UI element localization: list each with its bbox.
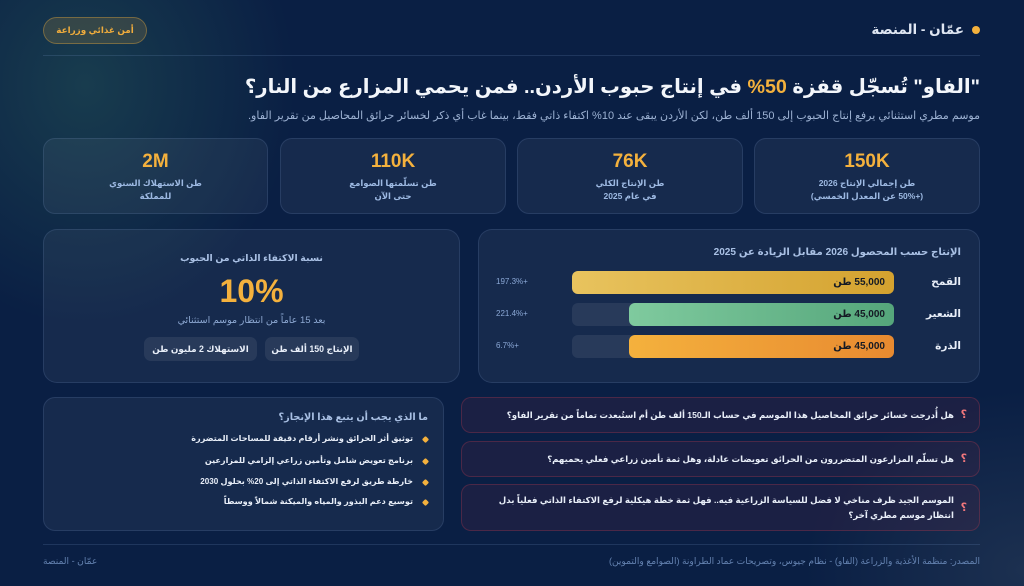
list item 1 (422, 436, 429, 443)
bar row: corn (496, 335, 961, 358)
bar row: wheat: القمح (931, 276, 961, 288)
question 2 (461, 441, 980, 477)
bar row: wheat: +197.3% (496, 277, 528, 286)
question 1: ؟ (961, 409, 967, 421)
chip: consumption (144, 337, 257, 361)
bar row: corn: +6.7% (496, 341, 519, 350)
chip: production (265, 337, 359, 361)
stat card: production 2025 (517, 138, 743, 214)
stat card: annual consumption: للمملكة (140, 191, 171, 201)
list text 2: برنامج تعويض شامل وتأمين زراعي إلزامي للمزارعين (205, 456, 413, 465)
bar row: barley: الشعير (926, 308, 961, 320)
stat card: total production 2026 (754, 138, 980, 214)
bar row: wheat: 55,000 طن (833, 277, 885, 288)
list text 3: خارطة طريق لرفع الاكتفاء الذاتي إلى 20% بحلول 2030 (200, 477, 413, 486)
question 2: هل تسلّم المزارعون المتضررون من الحرائق تعويضات عادلة، وهل ثمة تأمين زراعي فعلي يحميهم؟ (547, 454, 954, 464)
footer brand: عمّان - المنصة (43, 556, 97, 566)
big number: 10% (219, 273, 284, 309)
stat card: total production 2026: (+50% عن المعدل الخمسي) (811, 191, 923, 201)
caption: بعد 15 عاماً من انتظار موسم استثنائي (178, 315, 325, 326)
bar row: corn: 45,000 طن (833, 341, 885, 352)
chip: consumption: الاستهلاك 2 مليون طن (152, 344, 249, 354)
stat card: silos received (280, 138, 506, 214)
bar row: corn: الذرة (935, 340, 961, 352)
title: "الفاو" تُسجّل قفزة 50% في إنتاج حبوب الأردن.. فمن يحمي المزارع من النار؟ (245, 76, 980, 98)
stat card: production 2025: طن الإنتاج الكلي (596, 178, 664, 188)
topic badge: أمن غذائي وزراعة (56, 25, 134, 35)
platform label: عمّان - المنصة (871, 22, 964, 37)
list item 3 (422, 479, 429, 486)
list item 2 (422, 458, 429, 465)
question 3: الموسم الجيد ظرف مناخي لا فضل للسياسة الزراعية فيه.. فهل ثمة خطة هيكلية لرفع الاكتفاء الذاتي فعلياً بدل (499, 495, 954, 505)
question 1 (461, 397, 980, 433)
stat card: annual consumption (43, 138, 268, 214)
panel: production by crop (478, 229, 980, 383)
bar row: wheat (496, 271, 961, 294)
question 1: هل أُدرجت خسائر حرائق المحاصيل هذا الموسم في حساب الـ150 ألف طن أم استُبعدت تماماً من تقرير الفاو؟ (507, 410, 954, 420)
panel heading: نسبة الاكتفاء الذاتي من الحبوب (180, 252, 323, 263)
list text 4: توسيع دعم البذور والمياه والميكنة شمالاً ووسطاً (224, 497, 413, 506)
stat card: silos received: 110K (371, 151, 415, 172)
chart heading: الإنتاج حسب المحصول 2026 مقابل الزيادة عن 2025 (714, 247, 961, 258)
question 2: ؟ (961, 453, 967, 465)
subtitle: موسم مطري استثنائي يرفع إنتاج الحبوب إلى 150 ألف طن، لكن الأردن يبقى عند 10% اكتفاء ذاتي فقط، بينما غاب أي ذكر لخسائر حرائق المحاصيل من تقرير الفاو. (248, 110, 980, 122)
stat card: total production 2026: طن إجمالي الإنتاج 2026 (819, 178, 915, 188)
question 3 (461, 484, 980, 531)
stat card: annual consumption: 2M (142, 151, 169, 172)
icon: amber dot (972, 26, 980, 34)
stat card: silos received: طن تسلّمتها الصوامع (349, 178, 437, 188)
panel: next steps (43, 397, 444, 531)
bar row: barley (496, 303, 961, 326)
stat card: silos received: حتى الآن (374, 191, 412, 201)
stat card: production 2025: في عام 2025 (603, 191, 657, 201)
stat card: annual consumption: طن الاستهلاك السنوي (109, 178, 202, 188)
panel: self sufficiency (43, 229, 460, 383)
stat card: total production 2026: 150K (844, 151, 890, 172)
source: المصدر: منظمة الأغذية والزراعة (الفاو) - نظام جيوس، وتصريحات عماد الطراونة (الصوامع والتموين) (609, 556, 980, 566)
question 3: انتظار موسم مطري آخر؟ (848, 510, 954, 520)
stat card: production 2025: 76K (613, 151, 647, 172)
chip: production: الإنتاج 150 ألف طن (271, 344, 353, 354)
list text 1: توثيق أثر الحرائق ونشر أرقام دقيقة للمساحات المتضررة (191, 434, 413, 443)
bar row: barley: 45,000 طن (833, 309, 885, 320)
bar row: barley: +221.4% (496, 309, 528, 318)
question 3: ؟ (961, 502, 967, 514)
topic badge (43, 17, 147, 44)
panel heading: ما الذي يجب أن يتبع هذا الإنجاز؟ (279, 412, 428, 423)
list item 4 (422, 499, 429, 506)
